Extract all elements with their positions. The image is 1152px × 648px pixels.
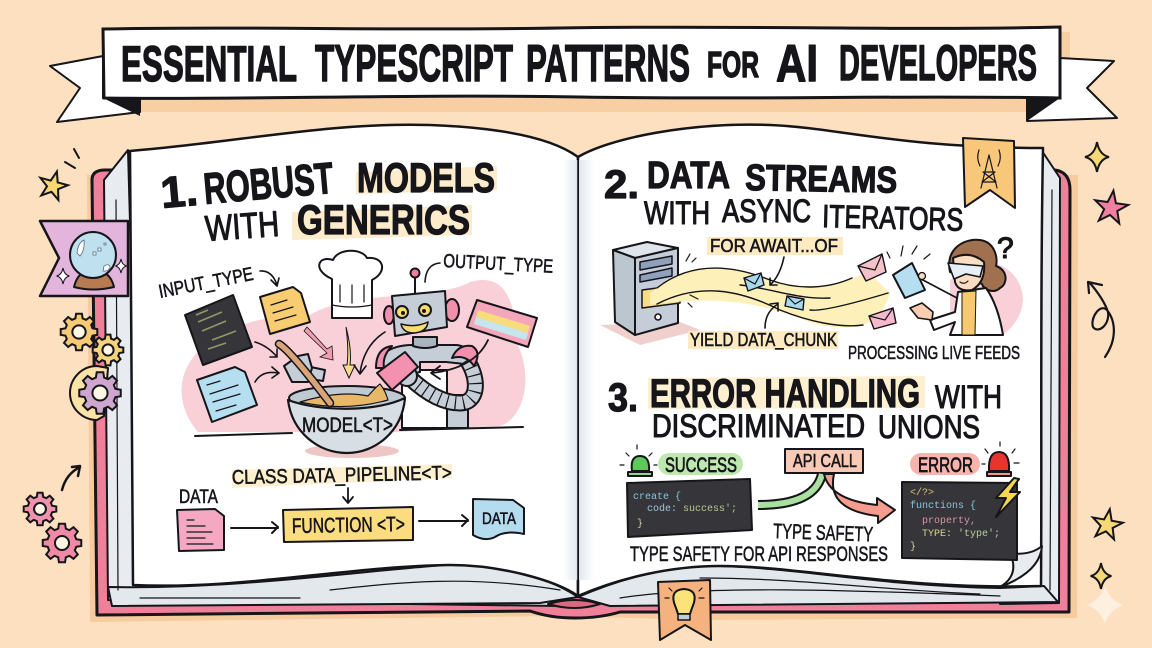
heading highlights: [292, 166, 497, 240]
question mark: ?: [997, 232, 1014, 265]
spark marks: [65, 149, 79, 168]
envelope pink: [869, 308, 896, 329]
label: data: DATA: [179, 487, 218, 508]
robot torso white: [402, 370, 447, 428]
left margin decorations: [24, 149, 128, 562]
spine shading right: [579, 160, 595, 580]
icon: scientist: [893, 232, 1014, 335]
label: model: MODEL<T>: [302, 414, 393, 437]
success pill: SUCCESS: [665, 454, 737, 477]
batter: [300, 384, 388, 407]
error code block: [902, 482, 1017, 560]
envelope blue: [744, 273, 764, 291]
cream crescent: [70, 366, 108, 420]
robot right arm fill: [410, 360, 475, 403]
error code block: </?>: [910, 487, 934, 499]
right page: [578, 125, 1043, 596]
right page stack: [1000, 148, 1060, 604]
icon: mixing bowl: [288, 384, 405, 453]
error pill: ERROR: [918, 454, 973, 477]
icon: blue data doc: DATA: [482, 509, 517, 528]
robot wrist: [304, 366, 325, 381]
spine nub: [548, 600, 600, 608]
banner right tail: [1027, 58, 1117, 121]
blue document: [893, 263, 925, 298]
heading 3: UNIONS: [878, 409, 980, 445]
label: class data pipeline: CLASS DATA_PIPELINE<T>: [232, 462, 452, 489]
error code block: property,: [922, 516, 976, 527]
pink blob background: [182, 280, 525, 432]
bowl rim: [289, 386, 405, 410]
icon: gold gear large: [61, 314, 97, 350]
title text: ESSENTIAL: [121, 36, 297, 92]
icon: server tower: [613, 242, 680, 335]
robot antenna: [414, 278, 416, 293]
red branch arrow: [824, 474, 895, 523]
icon: lightbulb bookmark: [658, 580, 711, 640]
icon: sparkle: [1085, 142, 1109, 172]
heading highlight: [648, 376, 925, 409]
icon: lightning bolt: [996, 478, 1020, 517]
banner left fold: [103, 98, 140, 116]
success code block: [627, 479, 752, 537]
bowl body: [288, 398, 405, 453]
label: processing live feeds: PROCESSING LIVE FEEDS: [848, 343, 1020, 363]
title text: [121, 35, 1037, 93]
page curl: [1000, 546, 1042, 587]
robot ears: [445, 299, 459, 321]
heading 1: 1.: [159, 166, 200, 218]
success code block: code: success';: [647, 503, 737, 515]
banner body: [103, 27, 1060, 98]
icon: blue doc: [197, 367, 257, 422]
icon: crystal ball bookmark: [40, 221, 128, 296]
stream lines: [657, 268, 888, 326]
heading 1: GENERICS: [297, 196, 470, 243]
icon: robot: [284, 268, 478, 428]
lower hand: [910, 303, 933, 320]
goggles: [948, 263, 983, 279]
data stream ribbon: [650, 268, 890, 327]
pink cover: [92, 170, 1070, 618]
icon: yellow doc: [260, 287, 310, 334]
arrow to function: [231, 522, 278, 533]
success pill: [658, 453, 743, 477]
green branch arrow: [758, 474, 822, 505]
heading 3: DISCRIMINATED: [652, 408, 865, 444]
ball highlights: [77, 240, 110, 271]
heading 1: WITH: [204, 203, 280, 249]
left page: [130, 125, 578, 596]
spine line: [577, 160, 579, 596]
icon: yellow star: [1090, 507, 1125, 540]
bulb: [673, 589, 695, 614]
icon: pink data doc: [177, 509, 224, 551]
arrow down: [343, 488, 353, 503]
spine shading left: [562, 160, 578, 580]
rays: [665, 588, 704, 598]
heading 3: ERROR HANDLING: [650, 372, 920, 416]
crystal ball base: [74, 270, 114, 290]
arrow to yellow doc: [260, 271, 279, 286]
label: input type: INPUT_TYPE: [157, 264, 255, 303]
arrow: [62, 466, 80, 490]
shirt: [962, 291, 976, 335]
heading 1: [159, 154, 497, 249]
function box: [283, 507, 413, 542]
banner right fold: [1027, 98, 1060, 121]
banner left tail: [50, 56, 140, 122]
envelope blue: [785, 296, 804, 310]
icon: purple gear: [79, 372, 121, 414]
upper hand: [918, 272, 926, 280]
robot pupils: [401, 311, 405, 315]
raised arm: [921, 279, 957, 298]
page stack lines: [116, 190, 1052, 598]
api call box: [785, 449, 863, 473]
function box: FUNCTION <T>: [292, 513, 405, 538]
hair: [949, 240, 1006, 291]
sparkles: [57, 268, 69, 284]
robot shoulders: [376, 346, 392, 368]
face: [953, 255, 984, 290]
error code block: functions {: [910, 500, 976, 512]
heading 3: WITH: [935, 379, 1002, 415]
robot right arm outline: [410, 360, 475, 403]
spoon fill: [279, 344, 330, 403]
pink card: [377, 352, 418, 390]
title text: TYPESCRIPT: [315, 35, 513, 93]
heading 2: ITERATORS: [822, 198, 964, 238]
icon: sparkle: [1091, 563, 1111, 589]
bottom page stack right: [578, 566, 1058, 606]
icon: dark code doc: [185, 295, 252, 365]
icon: wooden spoon: [279, 344, 330, 403]
icon: green alert light: [620, 445, 657, 476]
right margin decorations: [1085, 142, 1130, 623]
arrow to stream: [770, 257, 784, 285]
heading 3: 3.: [608, 376, 638, 420]
heading 3: [608, 372, 1002, 445]
error code block: TYPE: 'type';: [922, 528, 1000, 540]
label: output type: OUTPUT_TYPE: [443, 251, 554, 278]
crystal ball: [70, 232, 116, 278]
title text: PATTERNS: [526, 35, 690, 93]
robot leg: [447, 395, 468, 428]
robot shoulder yoke: [378, 345, 474, 380]
banner shadow: [112, 32, 1070, 112]
bowl shadow: [305, 444, 399, 458]
scientist pink circle: [950, 262, 1023, 335]
left page stack: [104, 150, 560, 606]
heading 2: DATA: [647, 155, 730, 197]
mouth: [960, 281, 968, 283]
lab coat: [930, 288, 1003, 335]
server shadow: [600, 322, 700, 345]
title text: AI: [776, 35, 818, 93]
icon: pink star: [1093, 188, 1130, 224]
robot left hand: [284, 354, 312, 382]
icon: pink table card: [467, 300, 537, 347]
robot head: [392, 291, 447, 336]
title banner: [50, 27, 1117, 122]
title text: FOR: [707, 44, 759, 85]
robot mouth: [401, 322, 428, 333]
heading 2: WITH: [644, 195, 710, 231]
icon: antenna bookmark: [963, 138, 1015, 208]
success code block: create {: [633, 491, 681, 503]
label: for await of: FOR AWAIT...OF: [710, 236, 838, 256]
arrow to data: [419, 515, 468, 526]
bottom page stack left: [108, 564, 578, 606]
arrow from table to robot: [431, 340, 488, 379]
label highlight: class data pipeline: [232, 464, 452, 488]
heading 1: MODELS: [357, 154, 495, 201]
icon: gold gear small: [93, 335, 123, 365]
panel: section 3 error handling: [608, 372, 1020, 566]
success code block: }: [637, 518, 643, 530]
icon: pink gear large: [43, 524, 81, 562]
icon: blue data doc: [473, 499, 524, 539]
heading 1: ROBUST: [202, 154, 335, 214]
flow arrows: [255, 327, 385, 382]
api call box: API CALL: [793, 451, 857, 471]
panel: section 2 data streams: [600, 138, 1023, 363]
green branch fill: [758, 474, 822, 505]
envelope pink: [858, 254, 886, 281]
icon: pink gear small: [24, 493, 56, 525]
label: yield data chunk: YIELD DATA_CHUNK: [690, 330, 837, 351]
icon: chef hat: [319, 251, 382, 318]
robot neck: [413, 337, 437, 348]
robot eyes: [396, 306, 408, 318]
arrow to stream: [765, 303, 778, 328]
book: [87, 125, 1078, 622]
icon: yellow star: [36, 168, 71, 201]
icon: red alert light: [982, 442, 1019, 476]
book shadow: [87, 175, 1078, 622]
panel: section 1 generics: [157, 154, 554, 551]
label: type safety for api responses: TYPE SAFETY FOR API RESPONSES: [630, 543, 888, 566]
label: type safety: TYPE SAFETY: [773, 520, 874, 546]
arrow to antenna: [425, 263, 440, 282]
spark marks: [686, 246, 930, 307]
heading 2: ASYNC: [722, 193, 811, 229]
heading 2: STREAMS: [745, 157, 898, 201]
robot arm segments: [410, 360, 475, 403]
heading 2: 2.: [604, 163, 639, 207]
loop arrow: [1088, 282, 1114, 357]
ground line: [195, 427, 523, 436]
white watermark sparkle: [1087, 587, 1123, 623]
robot right hand: [397, 366, 417, 386]
error code block: }: [910, 541, 916, 553]
bulb base: [678, 614, 690, 620]
bookmark flag: [40, 221, 128, 296]
bookmark ribbon: [658, 580, 711, 640]
heading 2: [604, 155, 964, 238]
